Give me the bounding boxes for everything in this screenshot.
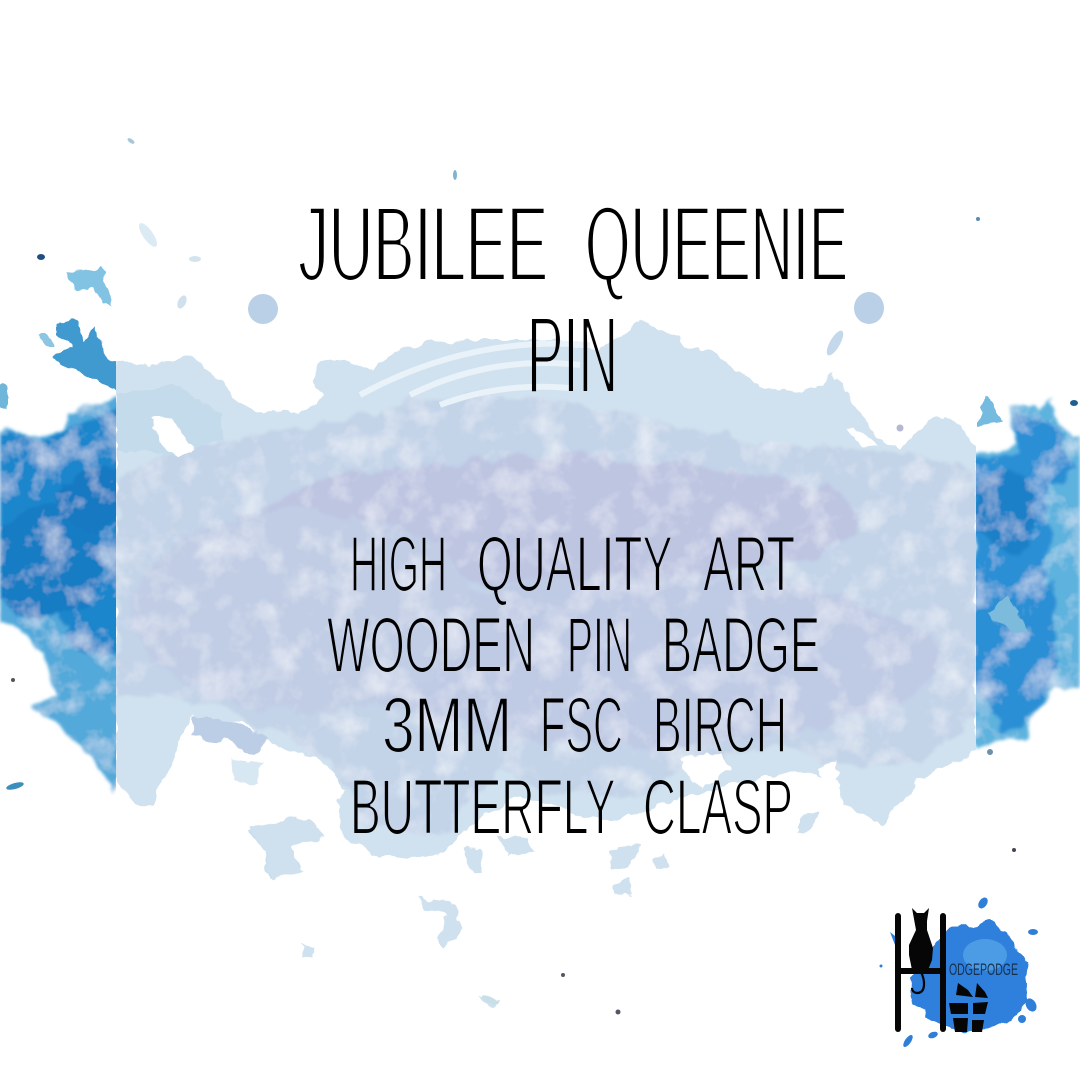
left watercolour splash [0, 266, 125, 795]
title: PIN [527, 294, 618, 417]
title line one: JUBILEE [298, 183, 548, 304]
right watercolour splash [970, 396, 1080, 748]
logo splash [880, 896, 1039, 1048]
paint flecks below the panel [250, 810, 818, 1008]
icon: gift box [949, 983, 988, 1032]
logo: Hodgepodge [880, 896, 1039, 1048]
detail line: art quality: ART [703, 519, 795, 608]
detail line: art quality: QUALITY [477, 519, 672, 608]
detail line: material: BIRCH [653, 680, 787, 769]
detail line: wooden pin badge: BADGE [662, 600, 820, 689]
detail line: material: 3MM [382, 680, 512, 769]
detail line: art quality: HIGH [350, 519, 447, 608]
pale central panel [116, 320, 976, 1008]
letter H [895, 913, 946, 1032]
title line one: QUEENIE [585, 183, 848, 304]
detail line: wooden pin badge: PIN [567, 600, 632, 689]
product details [327, 519, 820, 851]
detail line: clasp: CLASP [643, 762, 793, 851]
logo wordmark: ODGEPODGE [949, 960, 1018, 979]
detail line: clasp: BUTTERFLY [350, 762, 615, 851]
title [298, 183, 848, 417]
detail line: material: FSC [540, 680, 623, 769]
detail line: wooden pin badge: WOODEN [327, 600, 535, 689]
icon: cat [909, 908, 933, 993]
